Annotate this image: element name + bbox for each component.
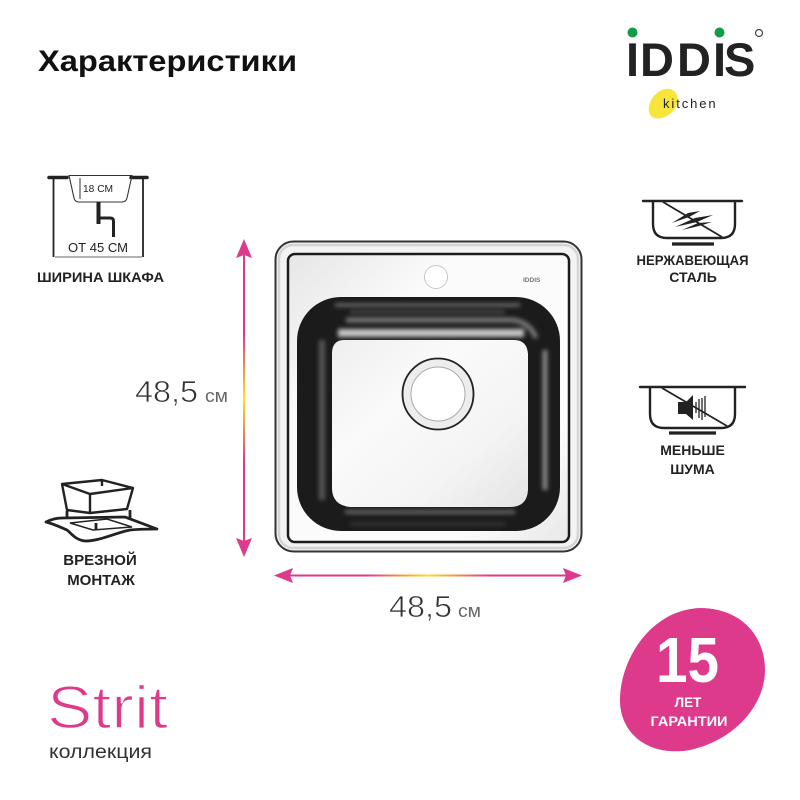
bowl floor (332, 340, 528, 507)
logo: IDDIS kitchen (626, 28, 762, 119)
icon: flush mount (46, 480, 157, 541)
bowl (297, 297, 560, 531)
width label: см (458, 601, 481, 621)
warranty badge (620, 608, 765, 751)
tap hole (424, 266, 448, 288)
width label (389, 589, 481, 624)
horizontal dimension arrow (274, 568, 582, 583)
warranty badge: ГАРАНТИИ (650, 714, 728, 729)
label: stainless steel: НЕРЖАВЕЮЩАЯ (636, 252, 748, 268)
warranty badge: 15 (656, 624, 719, 696)
height label: см (205, 386, 228, 406)
vertical dimension arrow (236, 239, 252, 557)
sink photo (276, 242, 582, 552)
label: flush mount: МОНТАЖ (67, 572, 135, 589)
height label (135, 374, 228, 409)
collection name: Strit (47, 674, 168, 741)
width label: 48,5 (389, 589, 452, 624)
drain (402, 358, 474, 430)
title: Характеристики (38, 45, 297, 78)
label: cabinet width: ШИРИНА ШКАФА (37, 269, 164, 285)
logo: IDDIS kitchen: IDDIS (626, 33, 755, 86)
warranty badge: ЛЕТ (675, 695, 702, 710)
label: flush mount: ВРЕЗНОЙ (63, 551, 137, 569)
brand mark: IDDIS (523, 277, 541, 284)
collection caption: коллекция (49, 742, 152, 763)
label: less noise: ШУМА (670, 461, 715, 477)
sink deck (288, 254, 569, 542)
logo: IDDIS kitchen: kitchen (663, 96, 718, 111)
label: stainless steel: СТАЛЬ (669, 269, 717, 285)
icon: cabinet width: 18 СМ (83, 183, 113, 195)
icon: stainless steel (643, 201, 742, 244)
label: less noise: МЕНЬШЕ (660, 442, 725, 458)
icon: cabinet width: ОТ 45 СМ (68, 241, 128, 255)
sink rim (276, 242, 582, 552)
height label: 48,5 (135, 374, 198, 409)
icon: cabinet width (49, 176, 147, 257)
icon: less noise (640, 387, 745, 433)
